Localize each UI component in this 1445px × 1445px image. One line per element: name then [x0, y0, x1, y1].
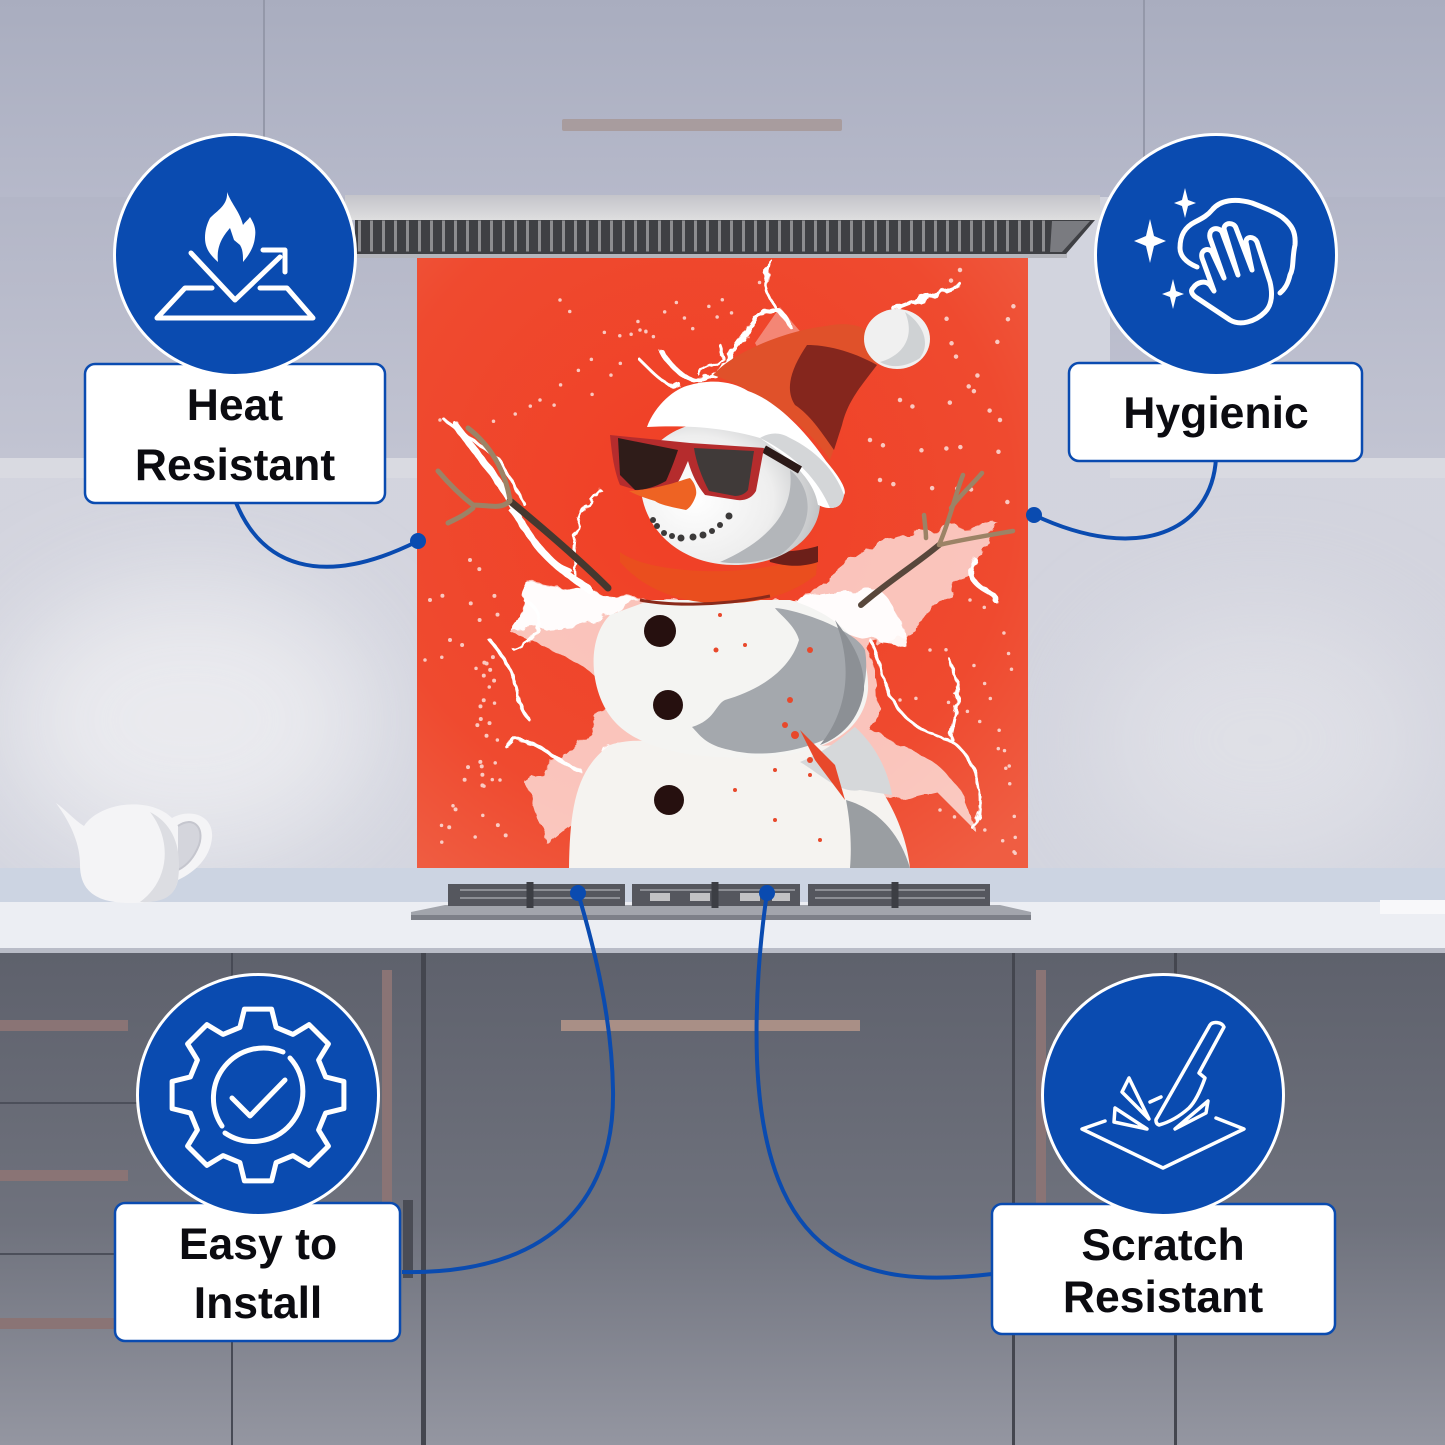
badge: scratch resistant	[992, 974, 1335, 1334]
label: scratch resistant	[1063, 1221, 1263, 1322]
splash: water burst	[445, 260, 1000, 842]
snowman middle ball	[594, 600, 868, 758]
droplets	[425, 270, 1020, 860]
glass panel: snowman artwork	[417, 258, 1028, 868]
coal buttons	[644, 615, 684, 815]
cooktop	[411, 882, 1031, 920]
head	[641, 420, 820, 565]
snowman bottom ball	[569, 741, 910, 868]
icon: flame over surface	[157, 192, 313, 318]
label: easy to install: Install	[194, 1279, 322, 1328]
label: scratch resistant: Resistant	[1063, 1273, 1263, 1322]
badge: heat resistant	[85, 134, 385, 503]
connector: hygienic	[1026, 458, 1216, 538]
label: heat resistant	[135, 381, 335, 490]
label: easy to install	[179, 1220, 337, 1328]
badge: easy to install	[115, 974, 400, 1341]
label: heat resistant: Resistant	[135, 441, 335, 490]
icon: wiping hand	[1134, 188, 1295, 323]
smile	[650, 512, 732, 542]
branch arms	[438, 428, 1013, 605]
icon: knife scratching surface	[1082, 1023, 1244, 1168]
icon: gear with check	[172, 1009, 344, 1181]
hat	[647, 309, 930, 508]
carrot nose	[629, 478, 696, 510]
red specks	[714, 613, 845, 842]
teapot	[56, 803, 212, 903]
label: easy to install: Easy to	[179, 1220, 337, 1269]
badge: hygienic	[1069, 134, 1362, 461]
connector: heat resistant	[235, 500, 426, 567]
label: scratch resistant: Scratch	[1081, 1221, 1245, 1270]
body shading	[692, 608, 910, 868]
sunglasses	[610, 435, 800, 500]
label: heat resistant: Heat	[187, 381, 283, 430]
connector: easy to install	[402, 885, 613, 1272]
scarf	[620, 546, 818, 604]
connector: scratch resistant	[757, 885, 992, 1278]
label: hygienic: Hygienic	[1123, 389, 1309, 438]
